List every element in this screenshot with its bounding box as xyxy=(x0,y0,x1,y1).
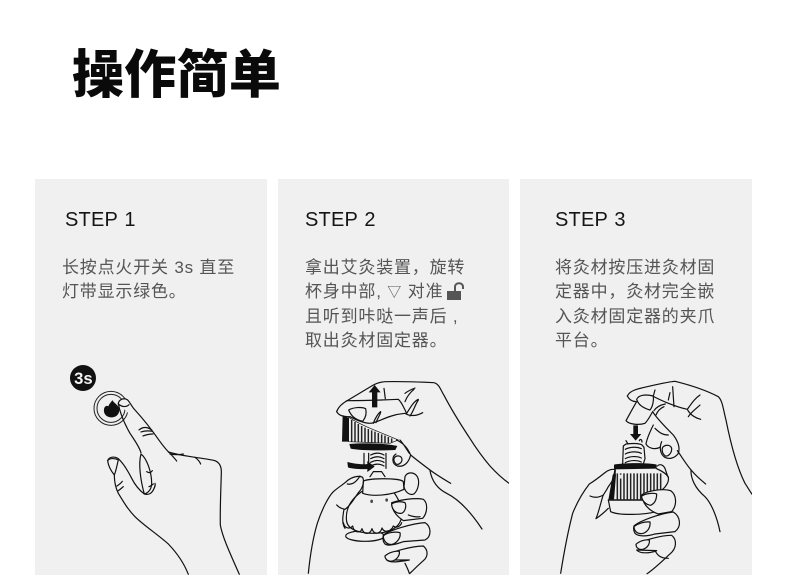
step 3 instructions: 定器中，灸材完全嵌 xyxy=(555,282,715,301)
hand pointing xyxy=(108,399,239,574)
icon: power button with flame xyxy=(94,391,128,425)
panel: step 2 xyxy=(278,179,509,575)
icon: open padlock xyxy=(447,282,464,300)
step 3 instructions: 入灸材固定器的夹爪 xyxy=(555,307,715,326)
step 3 instructions: 将灸材按压进灸材固 xyxy=(555,258,715,277)
step 1 instructions: 长按点火开关 3s 直至 xyxy=(62,258,235,277)
upper hand xyxy=(337,382,510,529)
illustration: hands removing the holder xyxy=(308,381,509,574)
step 3 instructions: 平台。 xyxy=(555,331,608,350)
lower device xyxy=(343,472,404,541)
step 2 instructions: 杯身中部, ▽ 对准 xyxy=(305,282,443,301)
icon: 3s badge xyxy=(70,365,96,391)
arrow: pull up xyxy=(369,385,381,407)
upper hand xyxy=(626,381,753,532)
step 2 instructions xyxy=(305,258,465,350)
step 2 instructions: 且听到咔哒一声后 , xyxy=(305,307,458,326)
lower hand xyxy=(308,473,430,574)
panel: step 1 xyxy=(35,179,267,575)
step 1 instructions xyxy=(62,258,235,301)
lower hand xyxy=(561,469,679,574)
step 1 instructions: 灯带显示绿色。 xyxy=(62,282,187,301)
step 3 instructions xyxy=(555,258,715,350)
step 1 heading: STEP 1 xyxy=(65,209,136,231)
holder with knurled body xyxy=(608,463,668,514)
illustration: pressing moxa into holder xyxy=(560,380,752,574)
title: 操作简单 xyxy=(72,47,281,105)
icon: 3s badge: 3s xyxy=(74,369,93,388)
moxa in holder xyxy=(623,439,645,464)
step 3 heading: STEP 3 xyxy=(555,209,626,231)
panel: step 3 xyxy=(520,179,752,575)
step 2 instructions: 拿出艾灸装置，旋转 xyxy=(305,258,465,277)
step 2 instructions: 取出灸材固定器。 xyxy=(305,331,447,350)
arrow: press down xyxy=(630,425,641,441)
step 2 heading: STEP 2 xyxy=(305,209,376,231)
illustration: finger pressing the button xyxy=(70,365,240,575)
knurled ring xyxy=(342,415,398,450)
spring holder xyxy=(364,453,387,470)
arrow: rotate xyxy=(347,461,375,472)
